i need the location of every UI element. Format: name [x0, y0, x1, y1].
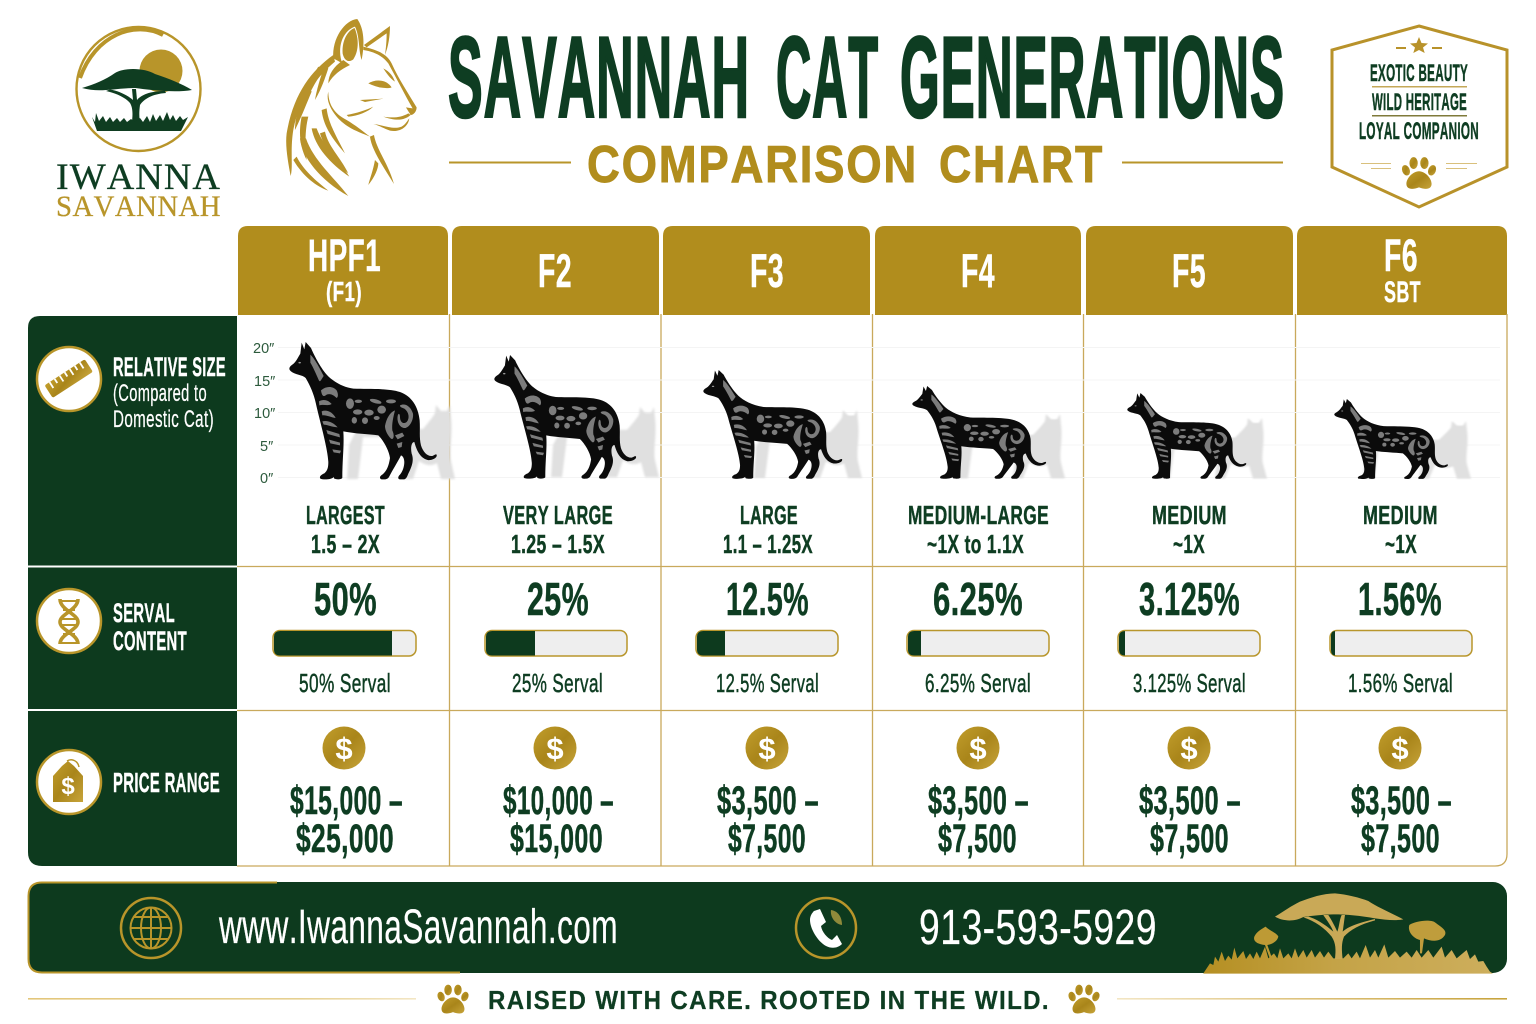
- domestic cat silhouette: [347, 405, 455, 479]
- title: SAVANNAH: [448, 14, 750, 142]
- header: F6 SBT: F6: [1384, 230, 1418, 281]
- row label: serval content: [37, 589, 187, 656]
- size label: MEDIUM-LARGE: [908, 500, 1049, 530]
- table column headers: [238, 226, 1507, 315]
- header: HPF1 (F1): [238, 226, 448, 315]
- icon: ruler: [37, 347, 101, 411]
- price: F3: $3,500 –: [717, 779, 819, 823]
- size label: [908, 500, 1049, 559]
- subtitle: [449, 136, 1283, 194]
- serval cat silhouette: [912, 386, 1046, 479]
- subtitle: COMPARISON: [587, 136, 918, 194]
- icon: paw left: [436, 985, 470, 1013]
- row label: relative size: RELATIVE SIZE: [113, 352, 226, 382]
- header: F3: F3: [750, 244, 784, 297]
- savanna landscape: [1203, 893, 1493, 974]
- logo sun: [140, 50, 182, 92]
- header: F2: F2: [538, 244, 572, 297]
- badge star: [1396, 37, 1442, 53]
- table grid: [237, 314, 1507, 866]
- price: HPF1: $25,000: [296, 817, 394, 861]
- icon: paw right: [1067, 985, 1101, 1013]
- badge paw: [1361, 157, 1477, 189]
- size chart axis: 20″: [253, 341, 274, 357]
- price: F4: $: [969, 731, 987, 766]
- badge text: [1359, 60, 1479, 145]
- serval content: HPF1 50%: 50% Serval: [299, 668, 391, 698]
- size chart axis: [253, 341, 1500, 487]
- grass mound: [1203, 944, 1493, 974]
- size label: [723, 500, 813, 559]
- icon: globe: [121, 898, 181, 958]
- price: F5: $3,500 –: [1139, 779, 1241, 823]
- row label: price range: [37, 750, 220, 814]
- size label: 1.5 – 2X: [311, 529, 380, 559]
- row label: price range: PRICE RANGE: [113, 767, 220, 798]
- size label: LARGE: [740, 500, 798, 530]
- price: F4: $7,500: [938, 817, 1017, 861]
- row label: relative size: [37, 347, 226, 433]
- icon: price tag: [37, 750, 101, 814]
- size label: [1363, 500, 1438, 559]
- serval content: F3 12.5%: 12.5% Serval: [716, 668, 819, 698]
- header: F2: [452, 226, 659, 315]
- price: F6: $: [1391, 731, 1409, 766]
- column: F5 relative size: [1127, 393, 1267, 559]
- serval content: F4 6.25%: [907, 573, 1049, 698]
- acacia tree: [1275, 893, 1403, 959]
- serval content: F3 12.5%: [696, 573, 838, 698]
- column: F2 relative size: [494, 355, 659, 559]
- price: F6: [1351, 726, 1452, 861]
- size label: 1.25 – 1.5X: [511, 529, 605, 559]
- size label: 1.1 – 1.25X: [723, 529, 813, 559]
- logo: Iwanna Savannah: [56, 27, 221, 223]
- size label: MEDIUM: [1152, 500, 1227, 530]
- header: F5: [1086, 226, 1293, 315]
- row labels panel: [28, 316, 237, 866]
- domestic cat silhouette: [754, 410, 862, 478]
- logo wordmark SAVANNAH: SAVANNAH: [56, 190, 221, 223]
- subtitle: CHART: [939, 136, 1104, 194]
- column: F4 relative size: [908, 386, 1065, 559]
- icon: DNA helix: [37, 589, 101, 653]
- size label: VERY LARGE: [503, 500, 613, 530]
- title: CAT: [776, 14, 879, 142]
- price: F2: $: [546, 731, 564, 766]
- serval content: F4 6.25%: 6.25% Serval: [925, 668, 1031, 698]
- header: F4: [875, 226, 1081, 315]
- size chart axis: 15″: [254, 374, 275, 390]
- serval content: HPF1 50%: 50%: [314, 573, 377, 625]
- serval content: F5 3.125%: 3.125%: [1139, 573, 1240, 625]
- price: F4: [928, 726, 1029, 861]
- serval content: F3 12.5%: 12.5%: [726, 573, 809, 625]
- size label: [1152, 500, 1227, 559]
- column: F3 relative size: [703, 370, 862, 559]
- serval content: F2 25%: [485, 573, 627, 698]
- price: F5: [1139, 726, 1241, 861]
- size label: LARGEST: [306, 500, 385, 530]
- small tree left: [1254, 927, 1278, 959]
- phone number: 913-593-5929: [919, 901, 1157, 955]
- size label: MEDIUM: [1363, 500, 1438, 530]
- header: F5: F5: [1172, 244, 1206, 297]
- price: F6: $7,500: [1361, 817, 1440, 861]
- size label: [503, 500, 613, 559]
- serval cat silhouette: [494, 355, 636, 479]
- badge: brand values: [1332, 26, 1507, 207]
- price: F3: [717, 726, 819, 861]
- price: HPF1: $15,000 –: [290, 779, 403, 823]
- price: F2: [503, 726, 614, 861]
- serval cat silhouette: [1127, 393, 1246, 479]
- row label: serval content: SERVAL: [113, 598, 175, 628]
- domestic cat silhouette: [1363, 421, 1471, 479]
- size label: ~1X to 1.1X: [927, 529, 1024, 559]
- column: HPF1 relative size: [289, 342, 455, 559]
- icon: phone: [796, 898, 856, 958]
- column: F6 relative size: [1334, 399, 1471, 559]
- header: F4: F4: [961, 244, 995, 297]
- tagline: RAISED WITH CARE. ROOTED IN THE WILD.: [488, 985, 1050, 1015]
- size chart axis: 10″: [254, 406, 275, 422]
- serval content: F5 3.125%: 3.125% Serval: [1133, 668, 1246, 698]
- header: F3: [663, 226, 870, 315]
- serval content: F5 3.125%: [1118, 573, 1260, 698]
- header: HPF1 (F1): (F1): [326, 276, 362, 307]
- header: F6 SBT: SBT: [1384, 276, 1421, 309]
- tagline: [28, 985, 1507, 1015]
- contact band: [28, 882, 1507, 974]
- serval content: F2 25%: 25%: [527, 573, 589, 625]
- price: HPF1: [290, 726, 403, 861]
- domestic cat silhouette: [551, 407, 659, 477]
- serval content: F6 1.56%: 1.56%: [1358, 573, 1442, 625]
- price: F2: $15,000: [510, 817, 603, 861]
- row label: serval content: CONTENT: [113, 626, 187, 656]
- price: F4: $3,500 –: [928, 779, 1029, 823]
- website: www.IwannaSavannah.com: [218, 901, 618, 954]
- row label: relative size: Domestic Cat): [113, 406, 214, 433]
- header: HPF1 (F1): HPF1: [308, 230, 381, 281]
- logo wordmark IWANNA: IWANNA: [56, 157, 221, 198]
- serval content: F4 6.25%: 6.25%: [933, 573, 1023, 625]
- price: F3: $: [758, 731, 776, 766]
- price: HPF1: $: [335, 731, 353, 766]
- size label: [306, 500, 385, 559]
- price: F6: $3,500 –: [1351, 779, 1452, 823]
- header: F6 SBT: [1297, 226, 1507, 315]
- icon: price tag: $: [61, 773, 75, 800]
- serval content: F2 25%: 25% Serval: [512, 668, 603, 698]
- small tree right: [1409, 921, 1445, 953]
- domestic cat silhouette: [1159, 418, 1267, 479]
- serval content: HPF1 50%: [273, 573, 416, 698]
- size chart axis: 0″: [260, 471, 273, 487]
- logo ring: [76, 27, 200, 151]
- serval cat silhouette: [1334, 399, 1448, 479]
- serval content: F6 1.56%: 1.56% Serval: [1348, 668, 1453, 698]
- serval cat silhouette: [289, 342, 437, 479]
- serval content: F6 1.56%: [1330, 573, 1472, 698]
- price: F3: $7,500: [728, 817, 806, 861]
- size label: ~1X: [1385, 529, 1417, 559]
- illustration: gold cat head: [286, 19, 417, 196]
- domestic cat silhouette: [957, 414, 1065, 478]
- price: F5: $7,500: [1150, 817, 1229, 861]
- logo acacia tree: [82, 69, 192, 131]
- serval cat silhouette: [703, 370, 842, 479]
- size label: ~1X: [1173, 529, 1205, 559]
- price: F2: $10,000 –: [503, 779, 614, 823]
- row label: relative size: (Compared to: [113, 380, 207, 407]
- size chart axis: 5″: [260, 439, 273, 455]
- price: F5: $: [1180, 731, 1198, 766]
